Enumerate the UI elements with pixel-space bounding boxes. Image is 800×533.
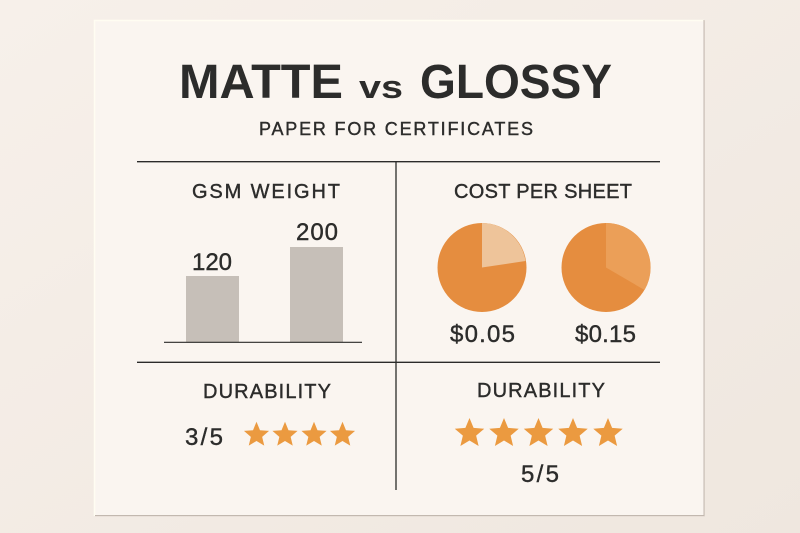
grid lines <box>137 161 660 490</box>
rating: 5/5: 5/5 <box>521 461 559 488</box>
title: GLOSSY <box>420 56 612 109</box>
panel: GSM weight <box>164 181 362 342</box>
bar chart: 200 <box>296 219 338 246</box>
heading: cost per sheet: COST PER SHEET <box>454 181 632 203</box>
bar chart: 120 <box>192 249 232 276</box>
bar chart <box>164 219 362 342</box>
price: matte: $0.05 <box>450 321 515 348</box>
paper card <box>94 20 705 517</box>
subtitle: PAPER FOR CERTIFICATES <box>259 119 533 139</box>
panel: glossy durability <box>455 380 623 488</box>
panel: matte durability <box>185 381 355 451</box>
heading: GSM weight: GSM WEIGHT <box>192 181 340 203</box>
title <box>179 56 612 109</box>
stars: glossy <box>455 418 623 446</box>
pie chart: matte cost <box>438 223 526 312</box>
title: MATTE <box>179 56 343 109</box>
pie chart: glossy cost <box>562 223 651 312</box>
price: glossy: $0.15 <box>575 321 636 348</box>
rating: 3/5: 3/5 <box>185 424 223 451</box>
heading: durability right: DURABILITY <box>477 380 605 402</box>
title: vs <box>359 69 403 105</box>
heading: durability left: DURABILITY <box>203 381 331 403</box>
stars: matte <box>244 422 355 446</box>
panel: cost per sheet <box>438 181 651 348</box>
